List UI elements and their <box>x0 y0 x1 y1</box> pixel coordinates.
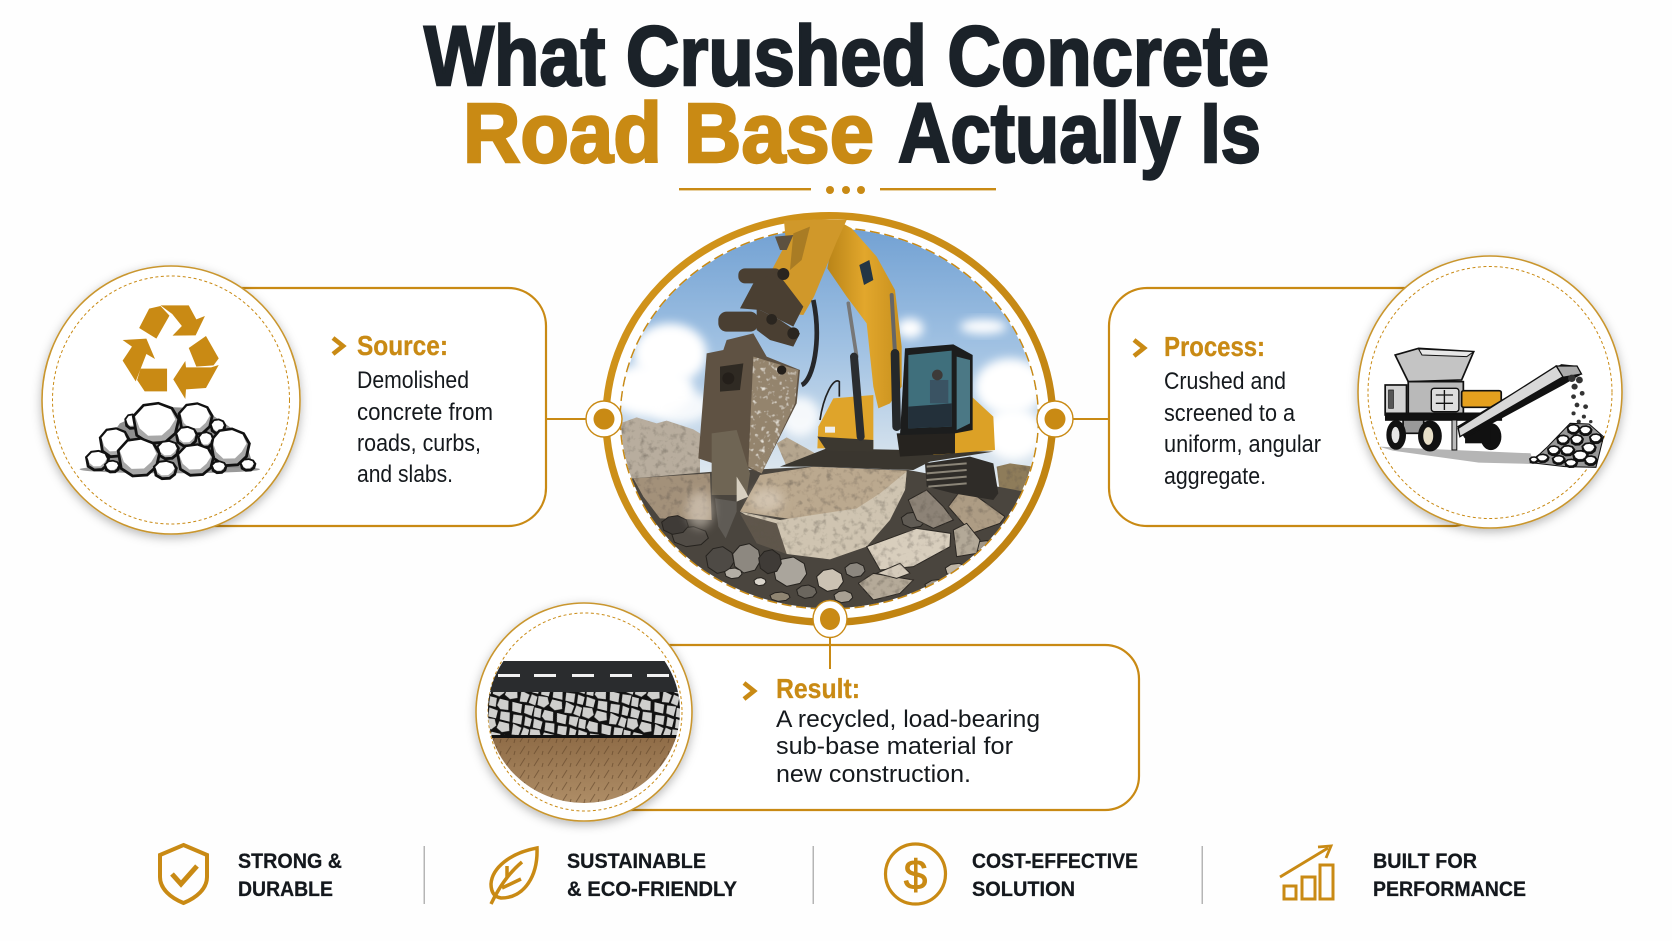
photo dashed edge <box>620 228 1038 609</box>
process medallion <box>1358 256 1622 528</box>
label: SUSTAINABLE <box>567 850 706 873</box>
clouds <box>607 318 1045 460</box>
chevron <box>744 683 754 699</box>
excavator arm assembly, overlaps the frame above the photo <box>687 219 902 538</box>
dust <box>687 488 783 528</box>
title: What Crushed Concrete <box>424 9 1269 103</box>
rubble blocks <box>662 512 995 603</box>
icon: dollar coin <box>886 844 946 904</box>
footer: strong and durable <box>160 845 342 903</box>
breaker chisel <box>715 498 737 538</box>
process text: screened to a <box>1164 400 1296 427</box>
process text <box>1164 368 1321 490</box>
breaker bolts <box>722 365 786 384</box>
label: BUILT FOR <box>1373 850 1477 873</box>
panel: source <box>42 266 590 534</box>
distant rubble <box>620 417 1033 497</box>
footer: sustainable <box>491 848 737 904</box>
result medallion <box>476 603 692 821</box>
label <box>1373 850 1526 901</box>
icon: pile of concrete rubble <box>80 403 260 479</box>
exhaust pipe <box>820 381 839 420</box>
result heading: Result: <box>776 673 860 704</box>
breaker linkage <box>718 268 803 347</box>
label <box>972 850 1138 901</box>
source text: concrete from <box>357 399 493 426</box>
icon: dollar coin: $ <box>904 851 927 898</box>
label: COST-EFFECTIVE <box>972 850 1138 873</box>
boom arm <box>827 220 902 408</box>
source medallion <box>42 266 300 534</box>
bottom connector node <box>813 600 847 638</box>
process box <box>1109 288 1490 526</box>
title <box>424 9 1269 180</box>
photo scene <box>607 220 1047 613</box>
icon: growth chart <box>1280 846 1333 899</box>
photo ring <box>606 216 1053 622</box>
label <box>238 850 342 901</box>
excavator cab <box>900 344 973 435</box>
sky <box>613 220 1047 487</box>
excavator rear house <box>817 395 995 457</box>
process text: aggregate. <box>1164 463 1266 490</box>
source connector <box>546 418 590 420</box>
label: SOLUTION <box>972 878 1075 901</box>
right connector node <box>1037 401 1073 437</box>
source text <box>357 367 493 488</box>
footer: cost-effective <box>886 844 1138 904</box>
boom plate <box>859 260 873 285</box>
process heading: Process: <box>1164 331 1265 362</box>
stick arm <box>770 219 847 315</box>
panel: result <box>476 603 1139 821</box>
label: PERFORMANCE <box>1373 878 1526 901</box>
icon: recycle symbol <box>123 305 219 399</box>
result text: sub-base material for <box>776 733 1013 760</box>
soil layer <box>491 735 677 803</box>
central photo: excavator breaking concrete <box>606 216 1053 622</box>
label: DURABLE <box>238 878 333 901</box>
left connector node <box>586 401 622 437</box>
footer: built for performance <box>1280 846 1526 901</box>
source text: Demolished <box>357 367 469 394</box>
result connector <box>829 630 831 669</box>
hydraulic hose <box>802 300 817 385</box>
source text: roads, curbs, <box>357 430 481 457</box>
label: & ECO-FRIENDLY <box>567 878 737 901</box>
process text: uniform, angular <box>1164 431 1321 458</box>
label: STRONG & <box>238 850 342 873</box>
process text: Crushed and <box>1164 368 1286 395</box>
chevron <box>1134 340 1144 356</box>
result text <box>776 706 1040 788</box>
excavator undercarriage <box>780 448 993 470</box>
hydraulic breaker body <box>698 333 800 495</box>
asphalt layer <box>490 661 678 692</box>
source text: and slabs. <box>357 461 453 488</box>
icon: road cross-section <box>488 661 680 803</box>
concrete slabs <box>633 467 907 559</box>
title: Actually Is <box>898 86 1261 180</box>
icon: leaf <box>491 848 537 904</box>
panel: process <box>1068 256 1622 528</box>
title: Road Base <box>463 86 874 180</box>
process connector <box>1068 418 1109 420</box>
ground <box>632 466 1022 608</box>
title divider <box>679 186 996 194</box>
icon: mobile crusher with conveyor <box>1379 348 1581 464</box>
icon: falling aggregate pile <box>1530 375 1604 467</box>
source box <box>171 288 546 526</box>
label <box>567 850 737 901</box>
icon: shield <box>160 845 207 903</box>
hydraulic cylinders <box>848 295 897 437</box>
source heading: Source: <box>357 330 448 361</box>
chevron <box>333 338 343 354</box>
excavator track <box>925 457 998 500</box>
result text: A recycled, load-bearing <box>776 706 1040 733</box>
result box <box>584 645 1139 810</box>
result text: new construction. <box>776 761 971 788</box>
aggregate layer <box>480 692 690 737</box>
